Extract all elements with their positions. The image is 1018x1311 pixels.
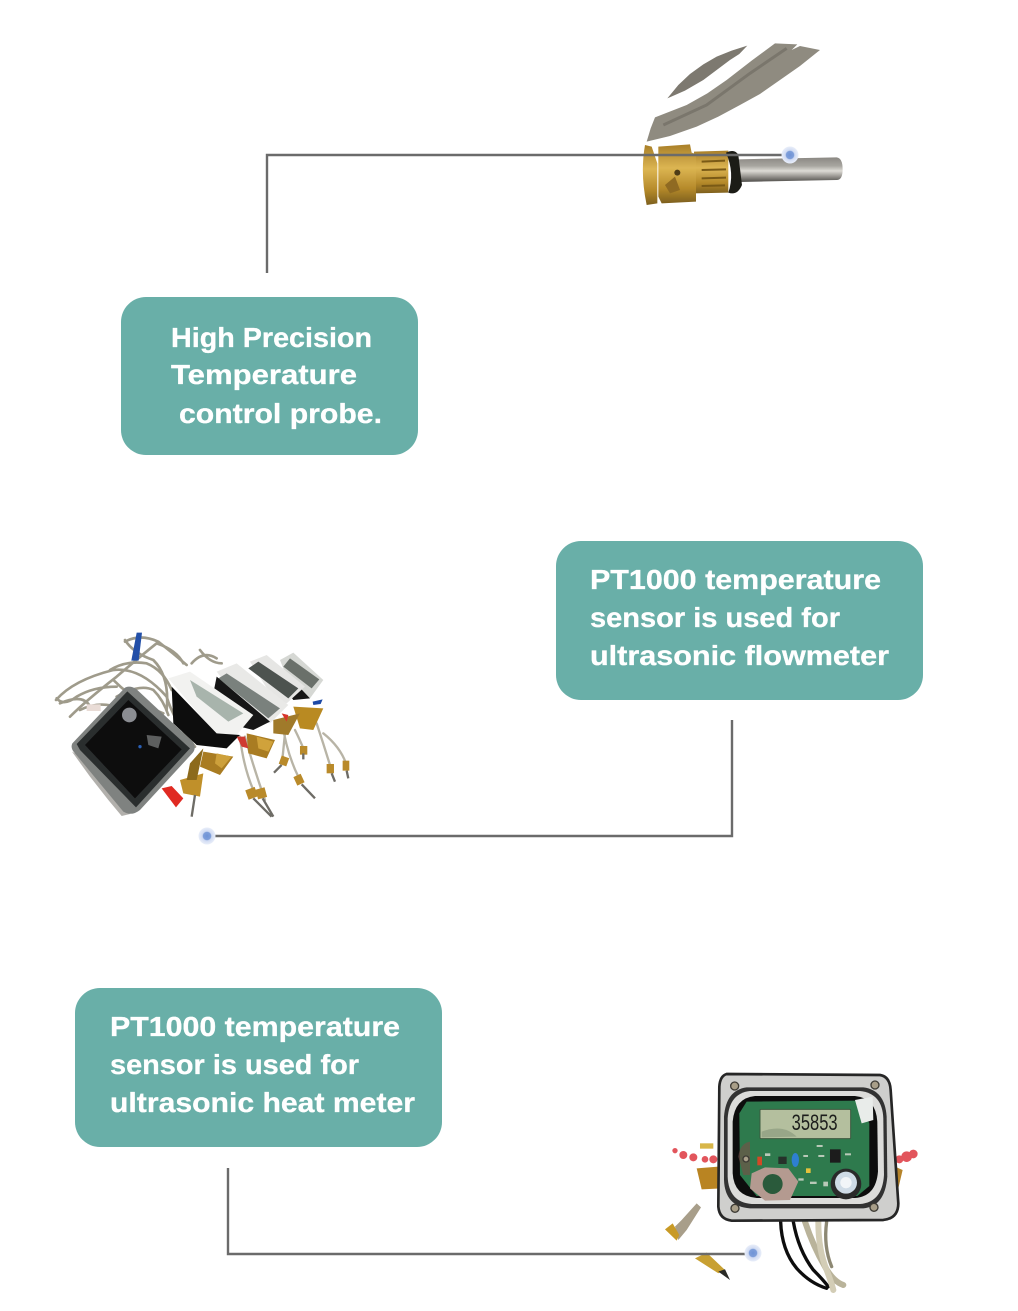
glare [855, 1097, 873, 1123]
callout: high precision probe: High Precision [171, 322, 372, 353]
marker dot: heat meter [744, 1244, 762, 1262]
callout: high precision probe: control probe. [179, 398, 382, 429]
lcd display [760, 1109, 851, 1139]
red tags [162, 786, 183, 807]
callout: ultrasonic flowmeter: ultrasonic flowmeter [590, 640, 889, 671]
callout: ultrasonic heat meter [75, 988, 442, 1147]
brass ends [697, 1167, 722, 1189]
chips [830, 1149, 841, 1163]
callout: ultrasonic flowmeter [556, 541, 923, 700]
blue tag [131, 633, 142, 661]
lcd reading: 35853 [792, 1110, 838, 1135]
circuit board [739, 1101, 869, 1196]
window [733, 1096, 878, 1198]
component details [765, 1145, 851, 1186]
front meter gauge [122, 708, 137, 722]
metal bracket [750, 1167, 798, 1201]
blue cap [313, 699, 323, 705]
connector line: probe [267, 155, 790, 273]
capacitors [792, 1153, 799, 1167]
callout: ultrasonic heat meter: PT1000 temperature [110, 1011, 400, 1042]
front meter [72, 687, 195, 814]
front meter shadow [72, 752, 130, 816]
cables [781, 1222, 843, 1290]
small probe lower [695, 1253, 725, 1273]
callout: ultrasonic heat meter: sensor is used for [110, 1049, 359, 1080]
probe cable upper strand [667, 46, 747, 98]
probe cable [647, 43, 820, 142]
threaded section [694, 151, 728, 193]
callout: ultrasonic flowmeter: PT1000 temperature [590, 564, 881, 595]
inner frame [724, 1087, 887, 1208]
image: ultrasonic heat meter [665, 1074, 918, 1290]
middle meter [168, 672, 253, 735]
marker dot: probe [782, 146, 798, 164]
outer case [718, 1074, 898, 1221]
back meters [280, 653, 323, 698]
connector line: heat meter [228, 1168, 753, 1254]
brass fittings [247, 733, 275, 758]
image: temperature probe [643, 43, 843, 205]
steel pin [738, 157, 843, 182]
battery [831, 1169, 861, 1199]
sensor cables [56, 637, 222, 747]
callout: high precision probe: Temperature [171, 359, 357, 390]
callout: ultrasonic heat meter: ultrasonic heat meter [110, 1087, 415, 1118]
o-ring [726, 151, 742, 193]
marker dot: flowmeter [198, 828, 216, 844]
image: group of ultrasonic flowmeters [56, 633, 349, 817]
callout: high precision probe [121, 297, 418, 455]
screws [731, 1081, 879, 1212]
connector line: flowmeter [207, 720, 732, 836]
red seal wires [672, 1148, 918, 1163]
brass body [658, 144, 696, 203]
small probe upper [675, 1203, 701, 1240]
callout: ultrasonic flowmeter: sensor is used for [590, 602, 840, 633]
small brass sensor heads [245, 746, 349, 800]
brass flange [643, 145, 657, 205]
